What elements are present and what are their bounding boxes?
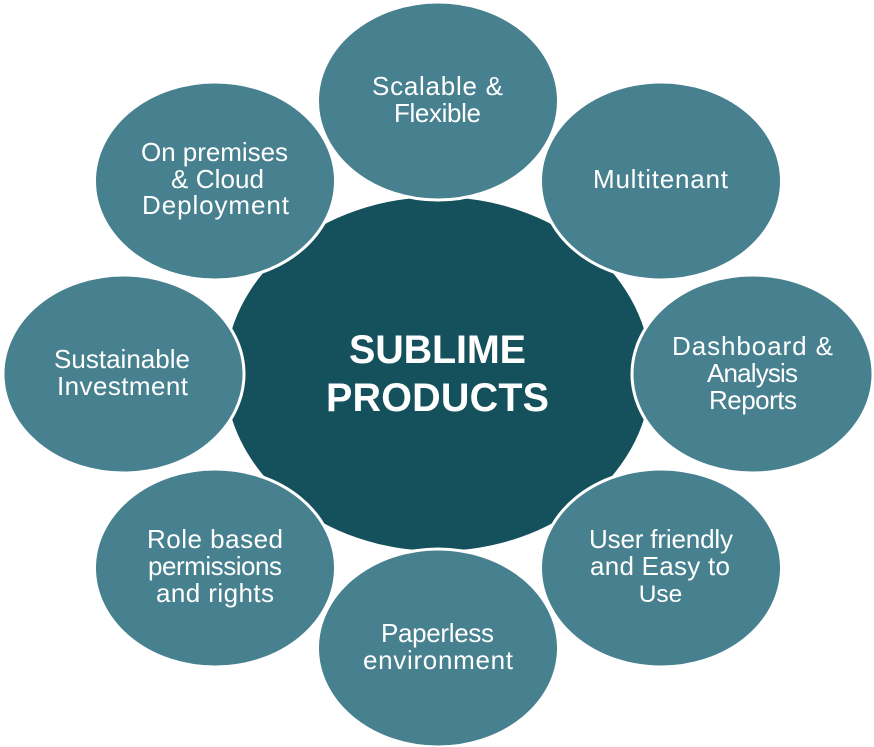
node: On premises & Cloud Deployment: & Cloud — [171, 164, 264, 194]
central hub: Sublime Products: PRODUCTS — [326, 376, 549, 420]
node: Paperless environment: Paperless — [381, 618, 494, 648]
node: Sustainable Investment — [3, 275, 244, 473]
node: Multitenant — [540, 82, 782, 280]
node: On premises & Cloud Deployment: On premises — [141, 137, 288, 167]
central hub: Sublime Products — [225, 197, 651, 551]
node: Dashboard & Analysis Reports: Reports — [709, 385, 797, 415]
central hub: Sublime Products: SUBLIME — [349, 328, 526, 372]
node: Role based permissions and rights: and rights — [156, 578, 274, 608]
node: Multitenant: Multitenant — [593, 164, 729, 194]
node: Dashboard & Analysis Reports — [632, 275, 873, 473]
node: User friendly and Easy to Use: Use — [639, 581, 682, 608]
node: On premises & Cloud Deployment — [94, 82, 336, 280]
node: Dashboard & Analysis Reports: Analysis — [707, 358, 798, 388]
node: Paperless environment — [318, 549, 558, 747]
node: Dashboard & Analysis Reports: Dashboard & — [672, 331, 833, 361]
node: Role based permissions and rights: permissions — [148, 551, 282, 581]
node: On premises & Cloud Deployment: Deployment — [142, 190, 290, 220]
node: Role based permissions and rights — [94, 469, 336, 667]
node: User friendly and Easy to Use: User friendly — [589, 524, 733, 554]
node: User friendly and Easy to Use — [540, 469, 782, 667]
node: Sustainable Investment: Investment — [57, 371, 189, 401]
node: Scalable & Flexible: Scalable & — [372, 71, 503, 101]
node: User friendly and Easy to Use: and Easy to — [590, 551, 730, 581]
node: Paperless environment: environment — [363, 645, 514, 675]
node: Sustainable Investment: Sustainable — [54, 344, 190, 374]
node: Scalable & Flexible — [318, 2, 558, 200]
node: Scalable & Flexible: Flexible — [394, 98, 481, 128]
node: Role based permissions and rights: Role based — [147, 524, 283, 554]
